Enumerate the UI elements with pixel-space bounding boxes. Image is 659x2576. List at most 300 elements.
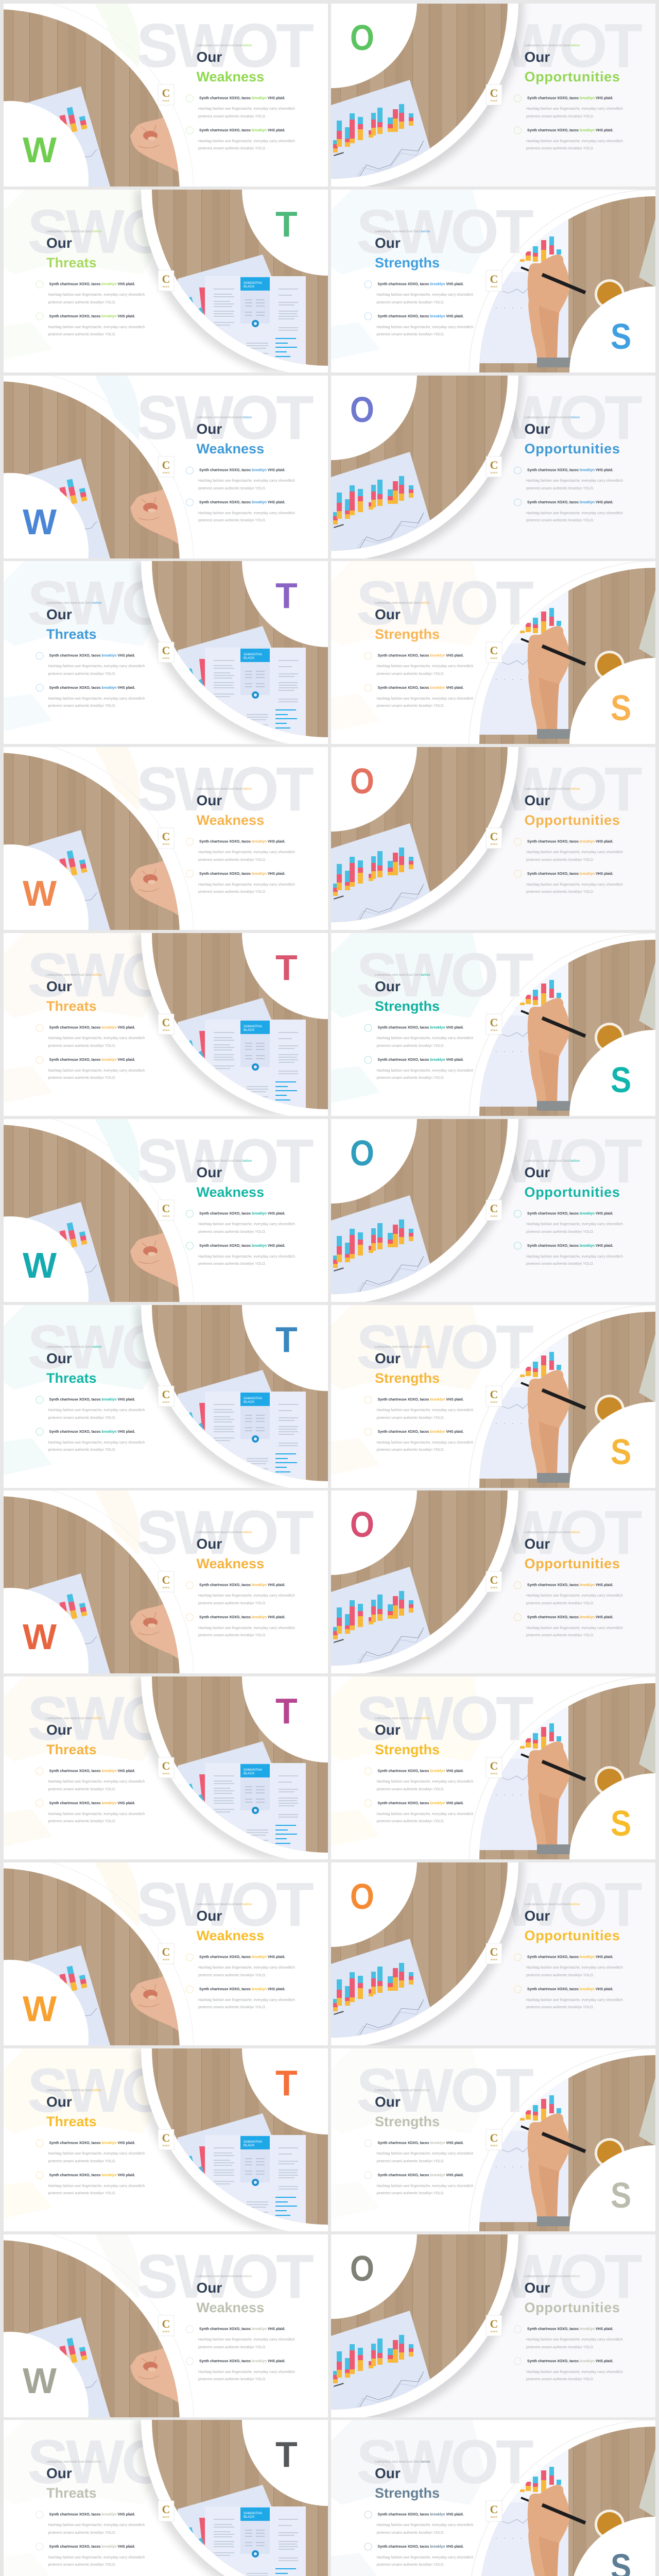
heading — [197, 2280, 264, 2315]
text block: Letterpress next level trust fund before — [375, 973, 430, 977]
bullet 2 — [186, 127, 295, 150]
text block: Letterpress next level trust fund before — [197, 787, 252, 791]
panel: row 8 Strengths — [331, 1305, 655, 1488]
bullet 1: Hashtag fashion axe fingerstache, everyday carry shoreditch — [526, 1223, 623, 1226]
panel: row 3 Opportunities — [331, 376, 655, 558]
photo — [0, 376, 194, 631]
watermark: SWOT — [27, 1312, 204, 1382]
text block: Letterpress next level trust fund before — [375, 2089, 430, 2092]
text block — [36, 2089, 145, 2195]
logo — [158, 642, 174, 663]
big letter: S — [611, 2175, 631, 2215]
bullet 1 — [365, 1768, 474, 1791]
logo — [486, 1757, 502, 1778]
logo: DESIGN — [163, 2145, 170, 2147]
heading — [375, 235, 440, 270]
bullet 2: Hashtag fashion axe fingerstache, everyday carry shoreditch — [377, 1069, 474, 1073]
bullet 1: Synth chartreuse XOXO, tacos brooklyn VHS plaid. — [527, 1956, 613, 1959]
panel: row 9 Opportunities — [331, 1490, 655, 1673]
bullet 1: Hashtag fashion axe fingerstache, everyday carry shoreditch — [526, 479, 623, 483]
logo: DESIGN — [491, 657, 498, 659]
bullet 1 — [186, 838, 295, 862]
logo — [158, 1757, 174, 1778]
watermark: SWOT — [465, 1869, 642, 1939]
watermark: SWOT — [356, 2055, 533, 2125]
bullet 2: Synth chartreuse XOXO, tacos brooklyn VHS plaid. — [527, 129, 613, 132]
panel: row 12 Strengths — [331, 2048, 655, 2231]
panel: row 4 Strengths — [331, 561, 655, 744]
heading — [197, 49, 264, 84]
heading — [524, 421, 620, 456]
heading: Weakness — [197, 1184, 264, 1200]
text block — [514, 1531, 623, 1637]
logo: C — [490, 459, 498, 471]
logo — [486, 642, 502, 663]
photo — [0, 1862, 194, 2117]
bullet 1: pinterest umami authentic brooklyn YOLO. — [198, 115, 266, 118]
bullet 2: Synth chartreuse XOXO, tacos brooklyn VHS plaid. — [527, 872, 613, 876]
big letter: W — [23, 873, 57, 913]
bullet 1 — [36, 281, 145, 304]
heading: Our — [375, 1722, 401, 1738]
heading — [375, 1722, 440, 1757]
photo — [144, 930, 524, 1312]
logo: DESIGN — [163, 1773, 170, 1775]
bullet 2: Synth chartreuse XOXO, tacos brooklyn VHS plaid. — [199, 1616, 285, 1619]
panel: row 13 Opportunities — [331, 2234, 655, 2417]
big letter: T — [275, 204, 298, 244]
heading: Our — [524, 2280, 550, 2296]
bullet 2: pinterest umami authentic brooklyn YOLO. — [377, 1448, 444, 1452]
text block: Letterpress next level trust fund before — [524, 1903, 580, 1906]
bullet 1: Synth chartreuse XOXO, tacos brooklyn VHS plaid. — [378, 1398, 464, 1401]
text block — [36, 973, 145, 1080]
bullet 2 — [36, 2543, 145, 2567]
heading: Weakness — [197, 1556, 264, 1571]
logo — [158, 1943, 174, 1964]
bullet 1 — [365, 1024, 474, 1048]
bullet 2: Hashtag fashion axe fingerstache, everyday carry shoreditch — [377, 2184, 474, 2188]
logo — [158, 270, 174, 291]
logo: C — [490, 1016, 498, 1029]
text block — [514, 787, 623, 894]
heading: Our — [524, 49, 550, 65]
text block: Letterpress next level trust fund before — [197, 1159, 252, 1163]
heading: Strengths — [375, 626, 440, 642]
bullet 1: pinterest umami authentic brooklyn YOLO. — [526, 2346, 594, 2349]
text block: Letterpress next level trust fund before — [375, 2460, 430, 2464]
bullet 2: pinterest umami authentic brooklyn YOLO. — [526, 1262, 594, 1266]
text block — [36, 601, 145, 708]
bullet 2: pinterest umami authentic brooklyn YOLO. — [526, 519, 594, 522]
text block — [365, 1717, 474, 1823]
logo: DESIGN — [163, 1587, 170, 1589]
heading: Our — [524, 1908, 550, 1924]
logo: DESIGN — [491, 2516, 498, 2518]
bullet 2: pinterest umami authentic brooklyn YOLO. — [526, 1634, 594, 1637]
big letter: W — [23, 2361, 57, 2401]
bullet 2: pinterest umami authentic brooklyn YOLO. — [377, 1820, 444, 1823]
logo — [486, 1200, 502, 1221]
bullet 2: Synth chartreuse XOXO, tacos brooklyn VHS plaid. — [527, 501, 613, 504]
bullet 1: Hashtag fashion axe fingerstache, everyday carry shoreditch — [526, 107, 623, 111]
big letter: S — [611, 1803, 631, 1843]
bullet 2 — [36, 1428, 145, 1452]
bullet 1: Synth chartreuse XOXO, tacos brooklyn VHS plaid. — [527, 840, 613, 844]
logo — [486, 828, 502, 849]
text block — [514, 416, 623, 522]
heading: Opportunities — [524, 69, 620, 84]
bullet 2: Hashtag fashion axe fingerstache, everyday carry shoreditch — [198, 512, 295, 515]
bullet 2: pinterest umami authentic brooklyn YOLO. — [198, 147, 266, 150]
text block — [365, 2460, 474, 2567]
bullet 2: Synth chartreuse XOXO, tacos brooklyn VHS plaid. — [378, 1430, 464, 1434]
text block — [186, 2275, 295, 2381]
watermark: SWOT — [136, 10, 314, 80]
text block — [186, 1531, 295, 1637]
heading — [197, 421, 264, 456]
heading: Our — [524, 421, 550, 437]
text block: Letterpress next level trust fund before — [524, 2275, 580, 2278]
watermark: SWOT — [356, 196, 533, 266]
photo — [0, 4, 194, 259]
bullet 2: Hashtag fashion axe fingerstache, everyday carry shoreditch — [48, 1812, 145, 1816]
text block: Letterpress next level trust fund before — [197, 1903, 252, 1906]
bullet 2: Synth chartreuse XOXO, tacos brooklyn VHS plaid. — [199, 1988, 285, 1991]
bullet 1: pinterest umami authentic brooklyn YOLO. — [526, 487, 594, 490]
bullet 2: Synth chartreuse XOXO, tacos brooklyn VHS plaid. — [49, 2545, 135, 2549]
bullet 2: Hashtag fashion axe fingerstache, everyday carry shoreditch — [198, 1255, 295, 1259]
bullet 1: pinterest umami authentic brooklyn YOLO. — [526, 1602, 594, 1605]
bullet 2 — [514, 1986, 623, 2009]
text block — [365, 1345, 474, 1452]
panel: row 11 Weakness — [4, 1862, 328, 2045]
bullet 2: Synth chartreuse XOXO, tacos brooklyn VHS plaid. — [49, 2174, 135, 2177]
logo: DESIGN — [491, 2331, 498, 2333]
bullet 2: Hashtag fashion axe fingerstache, everyday carry shoreditch — [526, 2370, 623, 2374]
big letter: T — [275, 1319, 298, 1360]
bullet 1: Synth chartreuse XOXO, tacos brooklyn VHS plaid. — [527, 468, 613, 472]
big letter: T — [275, 1691, 298, 1731]
big letter: T — [275, 2063, 298, 2103]
bullet 2: Synth chartreuse XOXO, tacos brooklyn VHS plaid. — [378, 2174, 464, 2177]
big letter: W — [23, 130, 57, 170]
text block — [514, 1159, 623, 1266]
logo — [158, 1571, 174, 1592]
text block: Letterpress next level trust fund before — [197, 416, 252, 419]
panel: row 1 Weakness — [4, 4, 328, 187]
bullet 2: Synth chartreuse XOXO, tacos brooklyn VHS plaid. — [49, 1430, 135, 1434]
logo: C — [162, 273, 170, 285]
text block: Letterpress next level trust fund before — [46, 2460, 102, 2464]
bullet 2 — [514, 127, 623, 150]
watermark: SWOT — [27, 196, 204, 266]
bullet 2: pinterest umami authentic brooklyn YOLO. — [198, 890, 266, 894]
bullet 1: Hashtag fashion axe fingerstache, everyday carry shoreditch — [198, 479, 295, 483]
bullet 1: Synth chartreuse XOXO, tacos brooklyn VHS plaid. — [49, 2513, 135, 2517]
logo: DESIGN — [491, 843, 498, 845]
logo: C — [162, 2317, 170, 2330]
bullet 1: pinterest umami authentic brooklyn YOLO. — [377, 301, 444, 304]
bullet 2: Hashtag fashion axe fingerstache, everyday carry shoreditch — [198, 1626, 295, 1630]
logo: C — [162, 1945, 170, 1958]
heading: Our — [197, 421, 222, 437]
logo: DESIGN — [491, 1215, 498, 1217]
bullet 1 — [514, 467, 623, 490]
heading — [46, 235, 97, 270]
bullet 2 — [36, 2172, 145, 2195]
bullet 2: Synth chartreuse XOXO, tacos brooklyn VHS plaid. — [199, 501, 285, 504]
bullet 2: Synth chartreuse XOXO, tacos brooklyn VHS plaid. — [199, 2360, 285, 2363]
bullet 1: pinterest umami authentic brooklyn YOLO. — [48, 672, 116, 676]
bullet 2: pinterest umami authentic brooklyn YOLO. — [377, 333, 444, 336]
watermark: SWOT — [136, 2241, 314, 2311]
photo — [135, 2334, 414, 2576]
watermark: SWOT — [136, 1869, 314, 1939]
bullet 1 — [365, 281, 474, 304]
bullet 2: pinterest umami authentic brooklyn YOLO. — [48, 704, 116, 708]
heading — [524, 792, 620, 828]
bullet 2: Synth chartreuse XOXO, tacos brooklyn VHS plaid. — [527, 1244, 613, 1248]
bullet 1: pinterest umami authentic brooklyn YOLO. — [377, 1416, 444, 1420]
logo: DESIGN — [163, 1029, 170, 1031]
watermark: SWOT — [356, 2427, 533, 2497]
watermark: SWOT — [465, 1497, 642, 1567]
bullet 1 — [186, 95, 295, 118]
bullet 1: Hashtag fashion axe fingerstache, everyday carry shoreditch — [377, 1409, 474, 1412]
panel: row 14 Strengths — [331, 2420, 655, 2576]
bullet 1 — [514, 1582, 623, 1605]
photo — [469, 561, 659, 830]
panel: row 8 Threats — [4, 1305, 328, 1488]
heading — [46, 1722, 97, 1757]
bullet 2 — [365, 313, 474, 336]
logo — [158, 2501, 174, 2521]
heading: Our — [46, 2094, 72, 2110]
bullet 2: pinterest umami authentic brooklyn YOLO. — [198, 2378, 266, 2381]
bullet 1: pinterest umami authentic brooklyn YOLO. — [48, 2531, 116, 2535]
bullet 1: Synth chartreuse XOXO, tacos brooklyn VHS plaid. — [49, 654, 135, 658]
bullet 1: pinterest umami authentic brooklyn YOLO. — [377, 2160, 444, 2163]
bullet 2: Synth chartreuse XOXO, tacos brooklyn VHS plaid. — [527, 2360, 613, 2363]
text block: Letterpress next level trust fund before — [46, 1717, 102, 1720]
bullet 1: Hashtag fashion axe fingerstache, everyday carry shoreditch — [526, 1594, 623, 1598]
heading: Our — [46, 606, 72, 622]
logo: C — [490, 1202, 498, 1215]
bullet 2: Hashtag fashion axe fingerstache, everyday carry shoreditch — [377, 1812, 474, 1816]
text block: Letterpress next level trust fund before — [375, 230, 430, 233]
bullet 1: pinterest umami authentic brooklyn YOLO. — [48, 1044, 116, 1048]
photo — [135, 475, 414, 744]
heading — [375, 606, 440, 642]
bullet 2: Synth chartreuse XOXO, tacos brooklyn VHS plaid. — [49, 686, 135, 690]
bullet 2: pinterest umami authentic brooklyn YOLO. — [198, 519, 266, 522]
bullet 1: Hashtag fashion axe fingerstache, everyday carry shoreditch — [377, 2152, 474, 2156]
text block: Letterpress next level trust fund before — [46, 973, 102, 977]
text block — [514, 2275, 623, 2381]
text block: Letterpress next level trust fund before — [46, 601, 102, 605]
heading — [197, 1908, 264, 1943]
bullet 2 — [514, 1614, 623, 1637]
text block — [36, 1345, 145, 1452]
panel: row 6 Threats — [4, 933, 328, 1116]
watermark: SWOT — [465, 382, 642, 452]
heading — [46, 2094, 97, 2129]
photo — [135, 1962, 414, 2231]
logo: C — [490, 87, 498, 99]
logo — [486, 2501, 502, 2521]
text block — [36, 230, 145, 336]
photo — [469, 2048, 659, 2317]
heading: Threats — [46, 2485, 97, 2501]
logo: DESIGN — [491, 1587, 498, 1589]
watermark: SWOT — [27, 568, 204, 638]
watermark: SWOT — [465, 1126, 642, 1196]
bullet 2: Hashtag fashion axe fingerstache, everyday carry shoreditch — [377, 697, 474, 701]
big letter: T — [275, 947, 298, 988]
logo: C — [490, 830, 498, 843]
big letter: S — [611, 1431, 631, 1472]
logo: C — [490, 2503, 498, 2516]
watermark: SWOT — [465, 754, 642, 824]
heading — [375, 1350, 440, 1386]
logo — [158, 828, 174, 849]
heading — [524, 1908, 620, 1943]
bullet 1: Synth chartreuse XOXO, tacos brooklyn VHS plaid. — [49, 282, 135, 286]
heading: Weakness — [197, 441, 264, 456]
watermark: SWOT — [356, 1683, 533, 1753]
big letter: W — [23, 1989, 57, 2029]
bullet 1: pinterest umami authentic brooklyn YOLO. — [198, 487, 266, 490]
bullet 1: Hashtag fashion axe fingerstache, everyday carry shoreditch — [198, 851, 295, 854]
heading: Weakness — [197, 69, 264, 84]
logo: C — [490, 2317, 498, 2330]
panel: row 3 Weakness — [4, 376, 328, 558]
bullet 2: pinterest umami authentic brooklyn YOLO. — [526, 2006, 594, 2009]
bullet 2: pinterest umami authentic brooklyn YOLO. — [48, 1820, 116, 1823]
bullet 2: Hashtag fashion axe fingerstache, everyday carry shoreditch — [526, 1626, 623, 1630]
text block: Letterpress next level trust fund before — [46, 1345, 102, 1349]
logo: DESIGN — [163, 100, 170, 102]
text block — [514, 1903, 623, 2009]
panel: row 6 Strengths — [331, 933, 655, 1116]
bullet 1: pinterest umami authentic brooklyn YOLO. — [377, 672, 444, 676]
bullet 1: Synth chartreuse XOXO, tacos brooklyn VHS plaid. — [49, 1770, 135, 1773]
bullet 2: pinterest umami authentic brooklyn YOLO. — [48, 1448, 116, 1452]
bullet 2: Synth chartreuse XOXO, tacos brooklyn VHS plaid. — [199, 1244, 285, 1248]
bullet 2 — [186, 1242, 295, 1266]
logo: C — [490, 1945, 498, 1958]
bullet 2 — [186, 499, 295, 522]
bullet 2: Hashtag fashion axe fingerstache, everyday carry shoreditch — [526, 1255, 623, 1259]
heading — [197, 1164, 264, 1200]
text block: Letterpress next level trust fund before — [46, 230, 102, 233]
heading: Our — [197, 792, 222, 808]
text block: Letterpress next level trust fund before — [524, 44, 580, 47]
text block — [365, 973, 474, 1080]
watermark: SWOT — [356, 940, 533, 1010]
bullet 1: pinterest umami authentic brooklyn YOLO. — [48, 2160, 116, 2163]
logo — [486, 1943, 502, 1964]
bullet 1: pinterest umami authentic brooklyn YOLO. — [48, 1416, 116, 1420]
bullet 1: Synth chartreuse XOXO, tacos brooklyn VHS plaid. — [527, 2327, 613, 2331]
heading: Our — [46, 1722, 72, 1738]
bullet 2: pinterest umami authentic brooklyn YOLO. — [526, 890, 594, 894]
photo — [135, 1219, 414, 1488]
logo: DESIGN — [491, 286, 498, 288]
bullet 1: Synth chartreuse XOXO, tacos brooklyn VHS plaid. — [199, 2327, 285, 2331]
big letter: S — [611, 316, 631, 357]
bullet 2: Synth chartreuse XOXO, tacos brooklyn VHS plaid. — [527, 1988, 613, 1991]
watermark: SWOT — [356, 1312, 533, 1382]
bullet 1: Synth chartreuse XOXO, tacos brooklyn VHS plaid. — [527, 1212, 613, 1215]
logo: DESIGN — [163, 1401, 170, 1403]
bullet 1: pinterest umami authentic brooklyn YOLO. — [198, 1974, 266, 1977]
bullet 2: pinterest umami authentic brooklyn YOLO. — [526, 147, 594, 150]
bullet 2 — [365, 2543, 474, 2567]
heading: Threats — [46, 626, 97, 642]
logo: C — [162, 1388, 170, 1401]
bullet 1: Hashtag fashion axe fingerstache, everyday carry shoreditch — [48, 1037, 145, 1040]
logo: DESIGN — [163, 2331, 170, 2333]
logo — [486, 456, 502, 477]
bullet 1: Hashtag fashion axe fingerstache, everyday carry shoreditch — [377, 2523, 474, 2527]
big letter: S — [611, 688, 631, 728]
text block: Letterpress next level trust fund before — [524, 416, 580, 419]
bullet 1: Hashtag fashion axe fingerstache, everyday carry shoreditch — [198, 1966, 295, 1970]
bullet 1: Synth chartreuse XOXO, tacos brooklyn VHS plaid. — [49, 1398, 135, 1401]
heading: Our — [524, 1164, 550, 1180]
bullet 1: Hashtag fashion axe fingerstache, everyday carry shoreditch — [377, 1037, 474, 1040]
watermark: SWOT — [465, 10, 642, 80]
bullet 1 — [186, 1210, 295, 1234]
text block: Letterpress next level trust fund before — [197, 2275, 252, 2278]
logo: C — [490, 1759, 498, 1772]
big letter: O — [350, 2248, 374, 2289]
logo — [486, 1571, 502, 1592]
logo — [158, 2129, 174, 2150]
bullet 2: Hashtag fashion axe fingerstache, everyday carry shoreditch — [48, 1069, 145, 1073]
bullet 2: Synth chartreuse XOXO, tacos brooklyn VHS plaid. — [378, 315, 464, 318]
heading: Our — [197, 1908, 222, 1924]
bullet 1 — [36, 2511, 145, 2535]
panel: row 14 Threats — [4, 2420, 328, 2576]
heading: Weakness — [197, 2300, 264, 2315]
bullet 1: Hashtag fashion axe fingerstache, everyday carry shoreditch — [48, 2152, 145, 2156]
logo — [486, 1014, 502, 1035]
bullet 1 — [514, 95, 623, 118]
bullet 1: Synth chartreuse XOXO, tacos brooklyn VHS plaid. — [199, 1212, 285, 1215]
big letter: W — [23, 502, 57, 542]
bullet 1: pinterest umami authentic brooklyn YOLO. — [48, 1788, 116, 1791]
bullet 1: Hashtag fashion axe fingerstache, everyday carry shoreditch — [48, 1780, 145, 1784]
bullet 2: pinterest umami authentic brooklyn YOLO. — [526, 2378, 594, 2381]
logo: DESIGN — [163, 286, 170, 288]
bullet 1: Hashtag fashion axe fingerstache, everyday carry shoreditch — [198, 107, 295, 111]
bullet 2: Synth chartreuse XOXO, tacos brooklyn VHS plaid. — [527, 1616, 613, 1619]
logo: DESIGN — [491, 100, 498, 102]
logo: DESIGN — [491, 1029, 498, 1031]
heading: Opportunities — [524, 1184, 620, 1200]
bullet 1 — [36, 652, 145, 676]
heading: Our — [197, 49, 222, 65]
heading: Strengths — [375, 2485, 440, 2501]
logo: DESIGN — [163, 843, 170, 845]
big letter: O — [350, 389, 374, 430]
heading: Our — [524, 792, 550, 808]
logo: C — [162, 2131, 170, 2144]
heading: Our — [524, 1536, 550, 1552]
